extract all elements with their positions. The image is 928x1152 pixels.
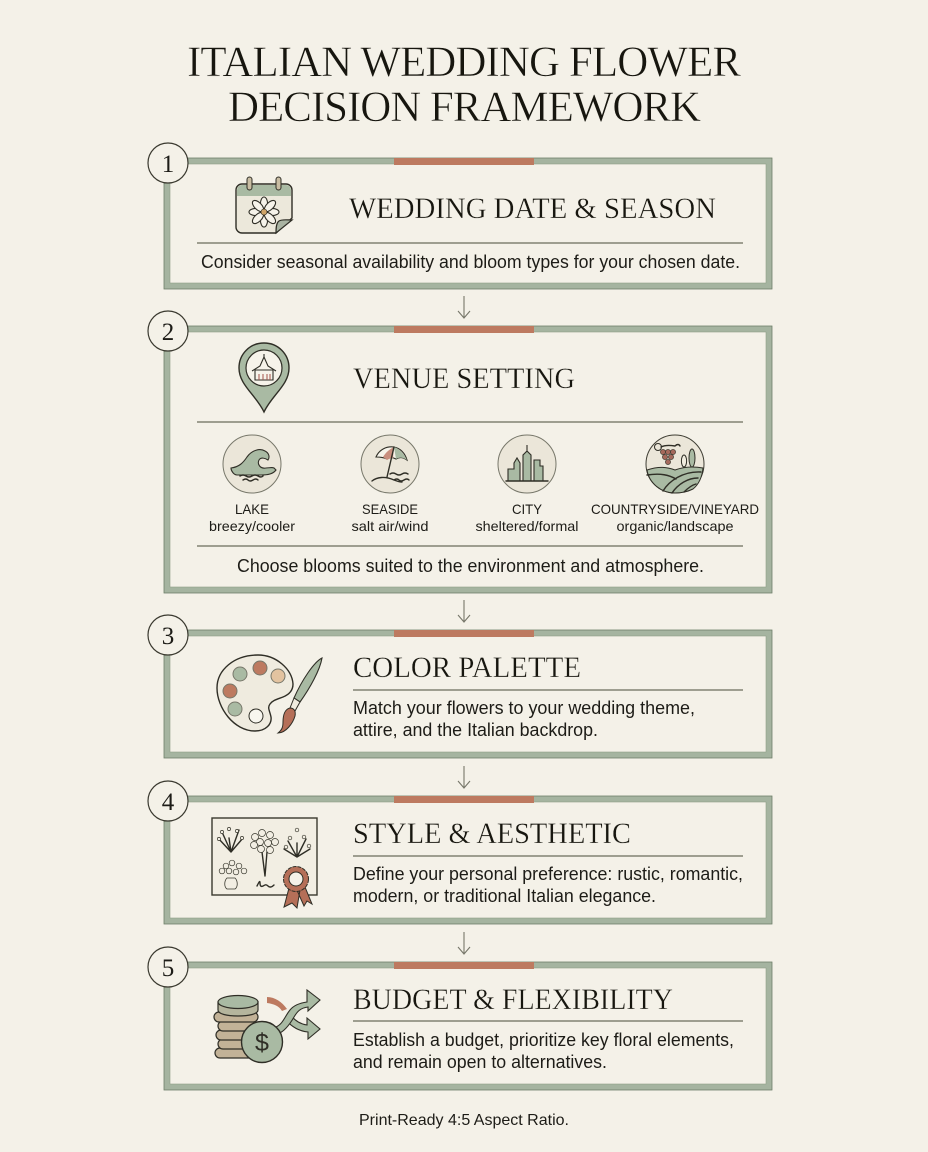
venue: seaside [352,435,428,534]
icon: paint palette and brush [217,655,322,733]
venue: countryside or vineyard: COUNTRYSIDE/VINEYARD [591,501,759,517]
icon: beach umbrella [361,435,419,493]
text: step 5 description [353,1030,734,1072]
title [187,39,741,131]
heading: style and aesthetic: STYLE & AESTHETIC [353,817,631,850]
venue: countryside or vineyard [591,435,759,534]
panel: step 5 budget and flexibility [148,947,772,1090]
venue: seaside: SEASIDE [362,501,418,517]
step number 4 [148,781,188,821]
icon: wave [223,435,281,493]
arrow: step 4 to 5 [458,932,470,954]
venue: seaside: salt air/wind [352,518,428,534]
text: step 4 description [353,864,743,906]
text: step 5 description: and remain open to alternatives. [353,1052,607,1072]
venue: city: CITY [512,501,543,517]
text: step 4 description: modern, or traditional Italian elegance. [353,886,656,906]
text: step 4 description: Define your personal preference: rustic, romantic, [353,864,743,884]
step number 1: 1 [162,151,174,178]
arrow: step 3 to 4 [458,766,470,788]
heading: budget and flexibility: BUDGET & FLEXIBILITY [353,983,673,1016]
panel: step 3 color palette [148,615,772,758]
title: ITALIAN WEDDING FLOWER [187,39,741,86]
step number 4: 4 [162,789,175,816]
venue: city [476,435,578,534]
heading: wedding date and season: WEDDING DATE & SEASON [349,192,716,225]
icon: coins and flexible arrows: $ [255,1029,269,1057]
step number 3 [148,615,188,655]
text: step 1 description: Consider seasonal availability and bloom types for your chosen date. [201,252,740,272]
text: step 2 description: Choose blooms suited to the environment and atmosphere. [237,556,704,576]
text: step 3 description [353,698,695,740]
text: step 3 description: attire, and the Italian backdrop. [353,720,598,740]
icon: calendar with flower [236,177,292,233]
step number 5: 5 [162,955,174,982]
icon: coins and flexible arrows [214,990,320,1062]
venue: lake: LAKE [235,501,269,517]
footer note: Print-Ready 4:5 Aspect Ratio. [359,1112,569,1129]
venue: countryside or vineyard: organic/landscape [616,518,734,534]
venue: lake: breezy/cooler [209,518,295,534]
step number 5 [148,947,188,987]
title: DECISION FRAMEWORK [228,84,701,131]
heading: color palette: COLOR PALETTE [353,651,581,684]
arrow: step 1 to 2 [458,296,470,318]
icon: vineyard hills [646,435,704,493]
step number 1 [148,143,188,183]
step number 2 [148,311,188,351]
venue: lake [209,435,295,534]
text: step 3 description: Match your flowers to your wedding theme, [353,698,695,718]
heading: venue setting: VENUE SETTING [353,362,575,395]
step number 3: 3 [162,623,174,650]
arrow: step 2 to 3 [458,600,470,622]
panel: step 2 venue setting [148,311,772,593]
text: step 5 description: Establish a budget, prioritize key floral elements, [353,1030,734,1050]
icon: location pin with church [239,343,289,412]
icon: mood board with bouquets and rosette [212,818,317,908]
panel: step 4 style and aesthetic [148,781,772,924]
venue: city: sheltered/formal [476,518,578,534]
step number 2: 2 [162,319,174,346]
icon: skyline [498,435,556,493]
panel: step 1 wedding date and season [148,143,772,289]
